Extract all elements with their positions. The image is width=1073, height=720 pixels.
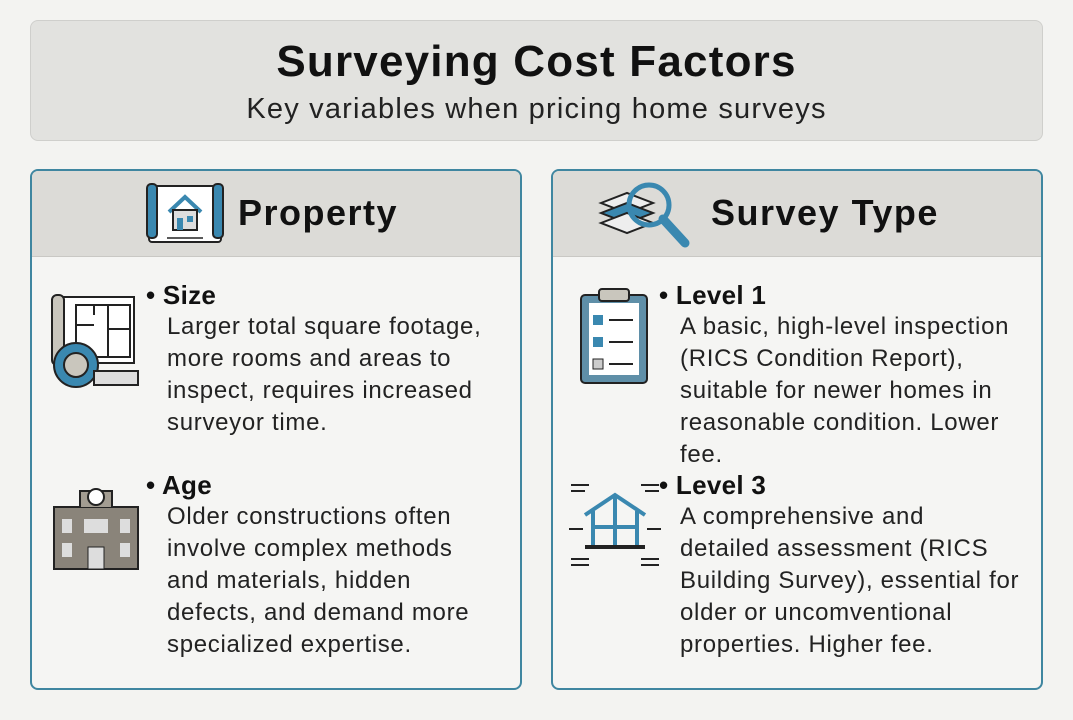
header: survey type: Survey Type (711, 192, 939, 233)
item: level 1 (659, 280, 1009, 468)
item: size (146, 280, 481, 436)
panel: survey type (551, 169, 1043, 690)
title: Surveying Cost Factors (276, 37, 797, 86)
item: level 1: reasonable condition. Lower (680, 409, 999, 436)
item: size: • Size (146, 280, 216, 310)
item: level 1: fee. (680, 441, 723, 468)
item: level 3: older or uncomventional (680, 599, 952, 626)
item: level 3: detailed assessment (RICS (680, 535, 988, 562)
panel: property (30, 169, 522, 690)
item: age: defects, and demand more (167, 599, 469, 626)
item: age: • Age (146, 470, 212, 500)
item: age: Older constructions often (167, 503, 451, 530)
icon: magnifier on documents (598, 182, 690, 248)
item: level 3: properties. Higher fee. (680, 631, 934, 658)
item: size: surveyor time. (167, 409, 328, 436)
item: size: Larger total square footage, (167, 313, 481, 340)
item: size: inspect, requires increased (167, 377, 473, 404)
item: level 3: A comprehensive and (680, 503, 924, 530)
item: age (146, 470, 469, 658)
item: age: specialized expertise. (167, 631, 412, 658)
item: age: and materials, hidden (167, 567, 411, 594)
icon: blueprint house (146, 183, 224, 243)
item: size: more rooms and areas to (167, 345, 451, 372)
title: Key variables when pricing home surveys (246, 93, 827, 125)
title (30, 20, 1043, 141)
header: property (32, 171, 520, 257)
header: property: Property (238, 192, 398, 233)
item: level 3: • Level 3 (659, 470, 766, 500)
icon: floor plan with tape (51, 294, 139, 388)
icon: old building (53, 488, 139, 570)
icon: structural frame (569, 484, 661, 566)
item: level 3 (659, 470, 1019, 658)
item: level 1: suitable for newer homes in (680, 377, 992, 404)
item: level 3: Building Survey), essential for (680, 567, 1019, 594)
icon: clipboard checklist (580, 288, 648, 384)
item: level 1: • Level 1 (659, 280, 766, 310)
item: level 1: (RICS Condition Report), (680, 345, 964, 372)
item: level 1: A basic, high-level inspection (680, 313, 1009, 340)
item: age: involve complex methods (167, 535, 453, 562)
header: survey type (553, 171, 1041, 257)
